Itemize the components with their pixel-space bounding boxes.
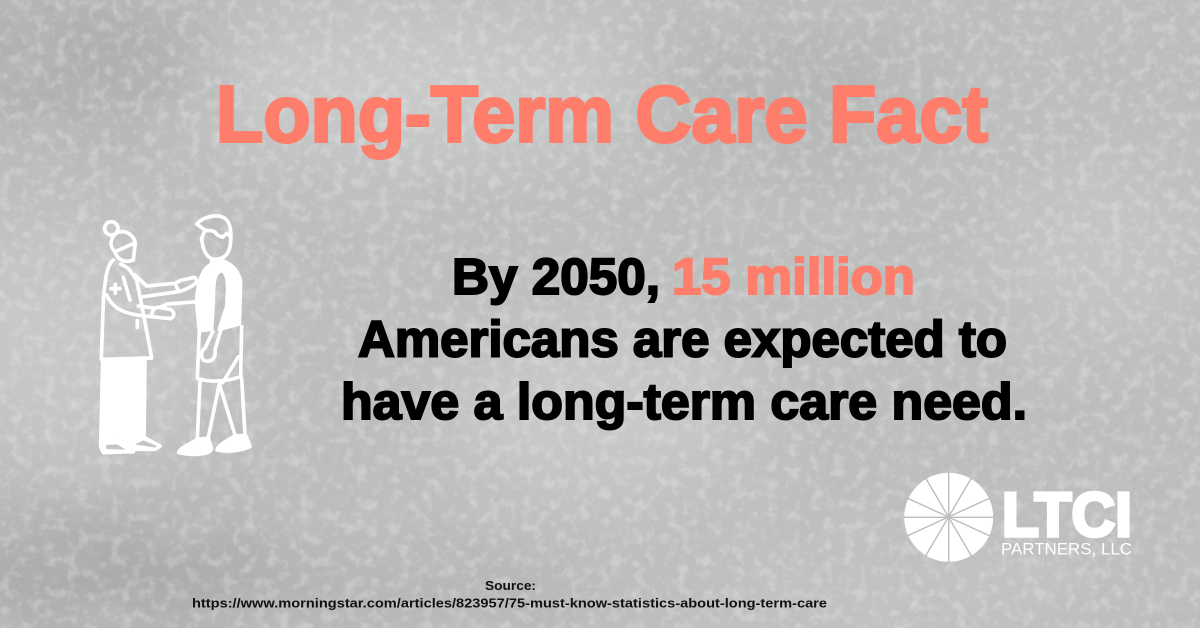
nurse figure xyxy=(101,222,197,453)
logo: LTCI Partners xyxy=(904,472,1132,562)
source url: https://www.morningstar.com/articles/823957/75-must-know-statistics-about-long-term-care xyxy=(192,596,827,610)
source citation xyxy=(192,578,827,610)
line 2: Americans are expected to xyxy=(358,310,1007,368)
line 1: By 2050, xyxy=(452,248,660,305)
source label: Source: xyxy=(485,578,536,593)
highlight: 15 million: 15 million xyxy=(672,248,915,305)
title: Long-Term Care Fact xyxy=(216,70,988,158)
line 3: have a long-term care need. xyxy=(341,373,1027,430)
illustration: nurse and patient xyxy=(101,216,250,454)
logo wordmark: LTCI xyxy=(1002,481,1132,550)
patient figure xyxy=(179,216,250,454)
logo subtitle: PARTNERS, LLC xyxy=(1001,540,1132,558)
fact statement xyxy=(341,248,1027,430)
logo wheel xyxy=(904,472,994,562)
